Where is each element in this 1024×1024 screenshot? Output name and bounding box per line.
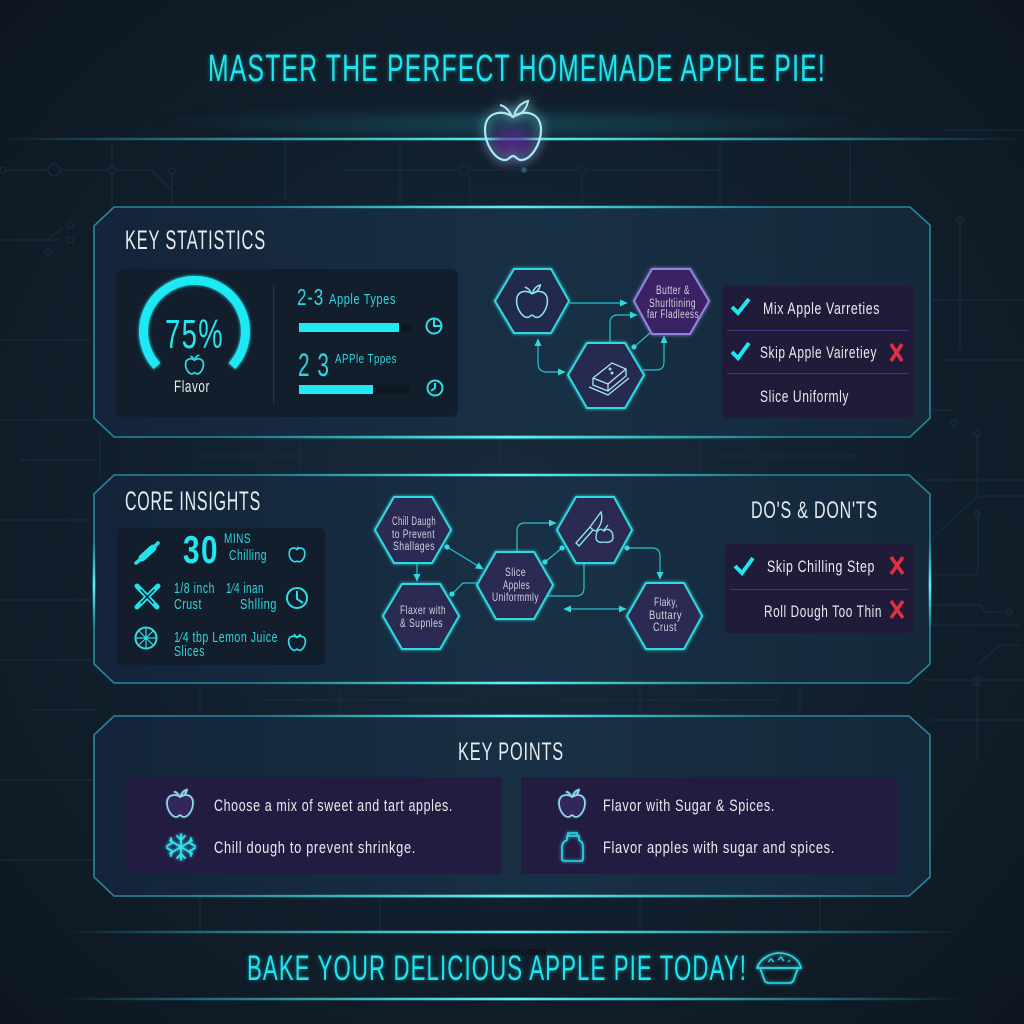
do and don't list xyxy=(722,286,914,418)
stat: lemon juice xyxy=(174,629,278,660)
text: choose apples: Choose a mix of sweet and tart apples. xyxy=(214,797,453,815)
hexagon: flaky buttery crust: Buttary xyxy=(649,608,682,622)
hexagon: chill dough: Shallages xyxy=(393,541,435,553)
heading: do's and don'ts: DO'S & DON'TS xyxy=(751,497,878,524)
stats card xyxy=(116,269,458,417)
hexagon: slice apples: Apples xyxy=(503,578,530,592)
hexagon: apple xyxy=(495,269,569,333)
hexagon: knife and apple xyxy=(557,497,632,563)
stat: lemon juice: Slices xyxy=(174,643,205,660)
flow connectors xyxy=(417,523,660,609)
watermark: recipecan.com xyxy=(479,947,546,958)
icon: rolling pin xyxy=(136,543,158,563)
gauge: 75% flavor xyxy=(144,280,246,396)
heading: core insights: CORE INSIGHTS xyxy=(125,486,261,516)
hexagon: butter and shortening xyxy=(634,269,709,334)
heading: key points: KEY POINTS xyxy=(458,738,564,766)
icon: crossed tools xyxy=(137,586,158,607)
panel: key points xyxy=(94,715,930,897)
icon: snowflake xyxy=(167,834,195,860)
stat: 30 mins chilling: Chilling xyxy=(229,548,267,564)
item: slice uniformly: Slice Uniformly xyxy=(760,387,849,406)
hexagon: flavor xyxy=(383,584,459,649)
icon: clock xyxy=(287,588,307,608)
key points right card xyxy=(521,777,898,874)
icon: glowing apple xyxy=(485,101,541,160)
stat: 2 3 apple types: 2 3 xyxy=(298,347,330,383)
text: flavor apples: Flavor apples with sugar and spices. xyxy=(603,839,835,857)
insights card xyxy=(117,528,325,665)
stat: 2-3 apple types xyxy=(297,284,442,334)
gauge: 75% flavor: 75% xyxy=(165,311,224,357)
stat: crust thickness: 1⁄4 inan xyxy=(226,580,264,597)
key points left card xyxy=(126,777,502,874)
hexagon: slice apples xyxy=(477,552,553,619)
stat: crust thickness: Shlling xyxy=(240,596,277,613)
item: roll dough too thin: Roll Dough Too Thin xyxy=(764,603,882,621)
stat: 30 mins chilling xyxy=(183,529,267,572)
footer top line xyxy=(60,931,964,933)
panel: core insights xyxy=(93,474,931,684)
check and cross: skip apple variety: Skip Apple Vairetiey xyxy=(760,343,877,362)
flow connectors xyxy=(538,303,664,372)
stat: 30 mins chilling: MINS xyxy=(224,530,251,546)
stat: crust thickness: 1/8 inch xyxy=(174,580,215,597)
hexagon: flavor: Flaxer with xyxy=(400,603,446,617)
do's and don'ts card xyxy=(725,544,914,633)
hexagon: slice apples: Uniformmly xyxy=(492,590,539,604)
heading: key statistics: KEY STATISTICS xyxy=(125,225,266,255)
stat: crust thickness xyxy=(174,580,277,613)
hexagon: butter stick xyxy=(568,343,644,408)
icon: apple xyxy=(559,790,585,817)
hexagon: flaky buttery crust: Flaky, xyxy=(654,595,678,609)
icon: apple xyxy=(167,790,193,817)
hexagon: flavor: & Supnles xyxy=(400,616,443,630)
icon: apple small xyxy=(289,634,305,650)
icon: pie xyxy=(757,953,801,983)
icon: spice jar xyxy=(562,833,583,861)
panel: key statistics xyxy=(94,206,930,438)
item: skip chilling step: Skip Chilling Step xyxy=(767,558,875,576)
stat: 2 3 apple types: APPle Tppes xyxy=(335,351,397,366)
stat: 2 3 apple types xyxy=(298,347,442,396)
hexagon: slice apples: Slice xyxy=(505,565,526,579)
stat: 2-3 apple types: Apple Types xyxy=(329,291,396,308)
hexagon: flaky buttery crust: Crust xyxy=(653,620,677,634)
icon: apple outline xyxy=(289,547,305,562)
stat: 2-3 apple types: 2-3 xyxy=(297,284,324,310)
text: chill dough: Chill dough to prevent shrinkge. xyxy=(214,839,416,857)
text: flavor heading: Flavor with Sugar & Spices. xyxy=(603,797,775,815)
stat: lemon juice: 1⁄4 tbp Lemon Juice xyxy=(174,629,278,646)
circuit board background pattern xyxy=(0,130,1024,932)
footer call to action: BAKE YOUR DELICIOUS APPLE PIE TODAY! xyxy=(247,949,747,988)
hexagon: flaky buttery crust xyxy=(627,583,702,649)
stat: crust thickness: Crust xyxy=(174,596,202,613)
check: mix apple varieties: Mix Apple Varreties xyxy=(763,299,880,318)
gauge: 75% flavor: Flavor xyxy=(174,377,210,396)
hexagon: chill dough xyxy=(375,497,451,563)
check: mix apple varieties xyxy=(732,299,880,318)
hexagon: chill dough: Chill Daugh xyxy=(392,516,436,528)
footer bottom line xyxy=(60,998,964,1000)
hexagon: butter and shortening: Shurltiining xyxy=(649,298,696,310)
hexagon: chill dough: to Prevent xyxy=(392,529,435,541)
hexagon: butter and shortening: far Fladleess xyxy=(647,309,699,321)
hexagon: butter and shortening: Butter & xyxy=(656,285,690,297)
title divider line xyxy=(16,110,1008,141)
stat: 30 mins chilling: 30 xyxy=(183,529,219,572)
icon: lemon slice xyxy=(136,628,156,648)
